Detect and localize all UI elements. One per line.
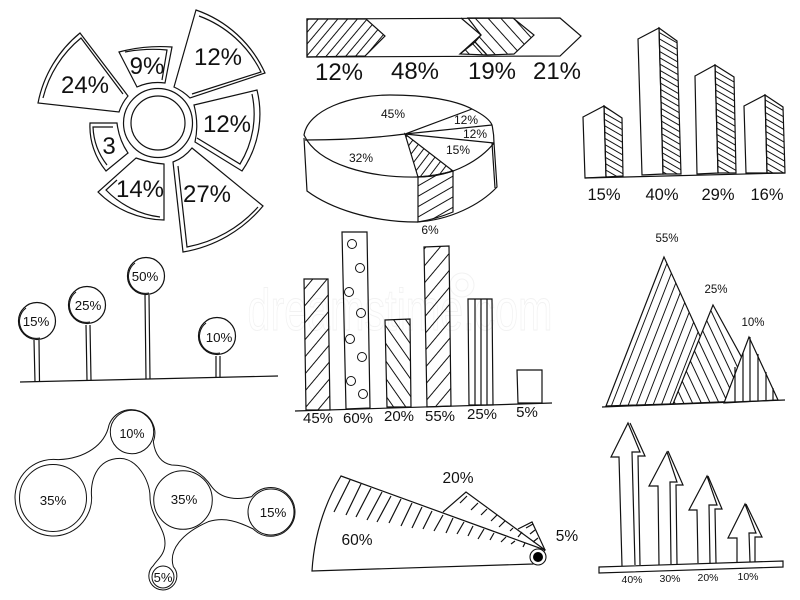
arrow labels: 10%: [737, 571, 759, 583]
bar labels: 60%: [343, 410, 373, 427]
arrow ground: [599, 561, 783, 573]
panel: lollipop signs: [18, 258, 278, 382]
sign 25%: 25%: [75, 298, 101, 313]
arrow 30%: [649, 451, 683, 565]
arrow labels: 40%: [621, 574, 643, 586]
arrow labels: 21%: [533, 58, 581, 85]
panel: 3D column chart: [583, 28, 785, 204]
sign 10%: 10%: [206, 330, 232, 345]
watermark: [248, 273, 552, 343]
bar labels: 5%: [516, 404, 538, 421]
triangle labels: 55%: [655, 233, 679, 245]
sector: 3: [90, 123, 128, 171]
triangle 55%: [606, 257, 730, 406]
panel: patterned bar chart: [295, 232, 552, 427]
radial labels: 12%: [203, 111, 251, 138]
sign 50%: 50%: [132, 269, 158, 284]
sign baseline: [20, 376, 278, 382]
sign 15%: [18, 302, 56, 382]
arrow labels: [315, 58, 581, 86]
sector: 27%: [173, 148, 263, 252]
bar 60%: [342, 232, 370, 409]
sign 25%: [68, 286, 106, 380]
fan labels: [341, 470, 578, 549]
sign 50%: [128, 258, 164, 379]
arrow 10%: [728, 504, 762, 562]
triangle 25% backing: [673, 305, 765, 404]
column baseline: [585, 173, 785, 178]
fan labels: 20%: [442, 470, 474, 487]
bubble 35% middle: 35%: [171, 492, 197, 507]
bar labels: 55%: [425, 408, 455, 425]
pie top ellipse: [304, 95, 494, 177]
triangle labels: 10%: [741, 317, 765, 329]
column 29%: [695, 65, 736, 174]
bar 45%: [304, 279, 330, 410]
radial labels: 12%: [194, 44, 242, 71]
fan labels: 5%: [556, 528, 578, 545]
column 16%: [744, 95, 785, 173]
pie labels: 12%: [454, 113, 478, 127]
sector: 24%: [38, 33, 128, 112]
bar labels: 45%: [303, 410, 333, 427]
column labels: [587, 186, 784, 204]
panel: 3D pie chart: [304, 95, 497, 237]
arrow labels: [621, 571, 759, 586]
panel: segmented arrow bar: [307, 18, 581, 86]
bar 55%: [424, 246, 451, 407]
bar 25%: [468, 299, 493, 405]
arrow 20%: [689, 476, 722, 563]
column labels: 16%: [750, 186, 784, 204]
bubble 35% left: [20, 464, 86, 532]
arrow 40%: [611, 423, 645, 566]
triangle labels: [655, 233, 765, 329]
hatched segment 12%: [307, 19, 385, 57]
small hatch piece: [460, 42, 487, 55]
sector: 12% top right: [174, 10, 265, 98]
panel: triangle chart: [602, 233, 785, 407]
arrow labels: 20%: [697, 572, 719, 584]
fan sector 20%: [443, 492, 545, 550]
triangle 25%: [673, 305, 765, 404]
bar baseline: [295, 403, 552, 411]
bar 20%: [385, 319, 411, 407]
panel: arrow chart: [599, 423, 783, 586]
bar 5%: [517, 370, 542, 403]
radial labels: 24%: [61, 72, 109, 99]
radial labels: 9%: [130, 53, 164, 80]
column labels: 15%: [587, 186, 621, 204]
arrow outline: [307, 18, 581, 57]
hatched wedge: [405, 134, 453, 177]
bubble 5%: 5%: [154, 570, 173, 585]
fan labels: 60%: [341, 532, 373, 549]
column labels: 29%: [701, 186, 735, 204]
fan sector 5%: [518, 522, 545, 550]
arrow labels: 19%: [468, 58, 516, 85]
column 40%: [638, 28, 681, 175]
fan hub: [530, 549, 546, 565]
watermark: dreamstime.com: [248, 278, 552, 343]
bar labels: [303, 404, 538, 427]
bubble outline: [15, 410, 295, 590]
sector: 12% right: [194, 90, 260, 171]
triangle labels: 25%: [704, 284, 728, 296]
sector: 14%: [98, 158, 164, 220]
triangle baseline: [602, 400, 785, 407]
sign 15%: 15%: [23, 314, 49, 329]
bubble 10%: [110, 410, 154, 454]
sector: 9%: [119, 47, 172, 87]
fan ticks: [334, 480, 538, 547]
bubble 35% middle: [154, 471, 212, 529]
pie labels: 6%: [421, 223, 439, 237]
bar labels: 25%: [467, 406, 497, 423]
sign 10%: [198, 318, 236, 377]
bubble 5%: [152, 566, 174, 588]
panel: radial sector chart: [38, 10, 265, 252]
bar 60% dots: [344, 240, 368, 398]
chevron divider: [460, 18, 481, 54]
column labels: 40%: [645, 186, 679, 204]
pie side wall: [304, 138, 497, 222]
arrow labels: 12%: [315, 59, 363, 86]
pie spokes: [305, 109, 494, 143]
triangle 10%: [724, 337, 778, 403]
radial labels: 14%: [116, 176, 164, 203]
panel: connected bubble diagram: [15, 410, 295, 590]
radial labels: 3: [102, 133, 116, 160]
bubble 15%: 15%: [260, 505, 286, 520]
radial labels: [61, 44, 251, 208]
radial labels: 27%: [183, 181, 231, 208]
centre ring: [124, 88, 192, 158]
bar labels: 20%: [384, 408, 414, 425]
bubble 15%: [248, 489, 294, 535]
bubble 10%: 10%: [119, 427, 145, 441]
hatched side face: [418, 171, 453, 222]
panel: fan chart: [312, 470, 578, 571]
pie labels: 12%: [463, 127, 487, 141]
pie labels: 32%: [349, 151, 373, 165]
pie labels: [349, 107, 487, 237]
right edge line: [492, 143, 495, 188]
fan sector 60%: [312, 476, 545, 571]
arrow labels: 30%: [659, 573, 681, 585]
pie labels: 15%: [446, 143, 470, 157]
arrow labels: 48%: [391, 58, 439, 85]
hatched segment 19%: [468, 18, 534, 55]
column 15%: [583, 106, 623, 178]
bubble 35% left: 35%: [40, 493, 66, 508]
pie labels: 45%: [381, 107, 405, 121]
